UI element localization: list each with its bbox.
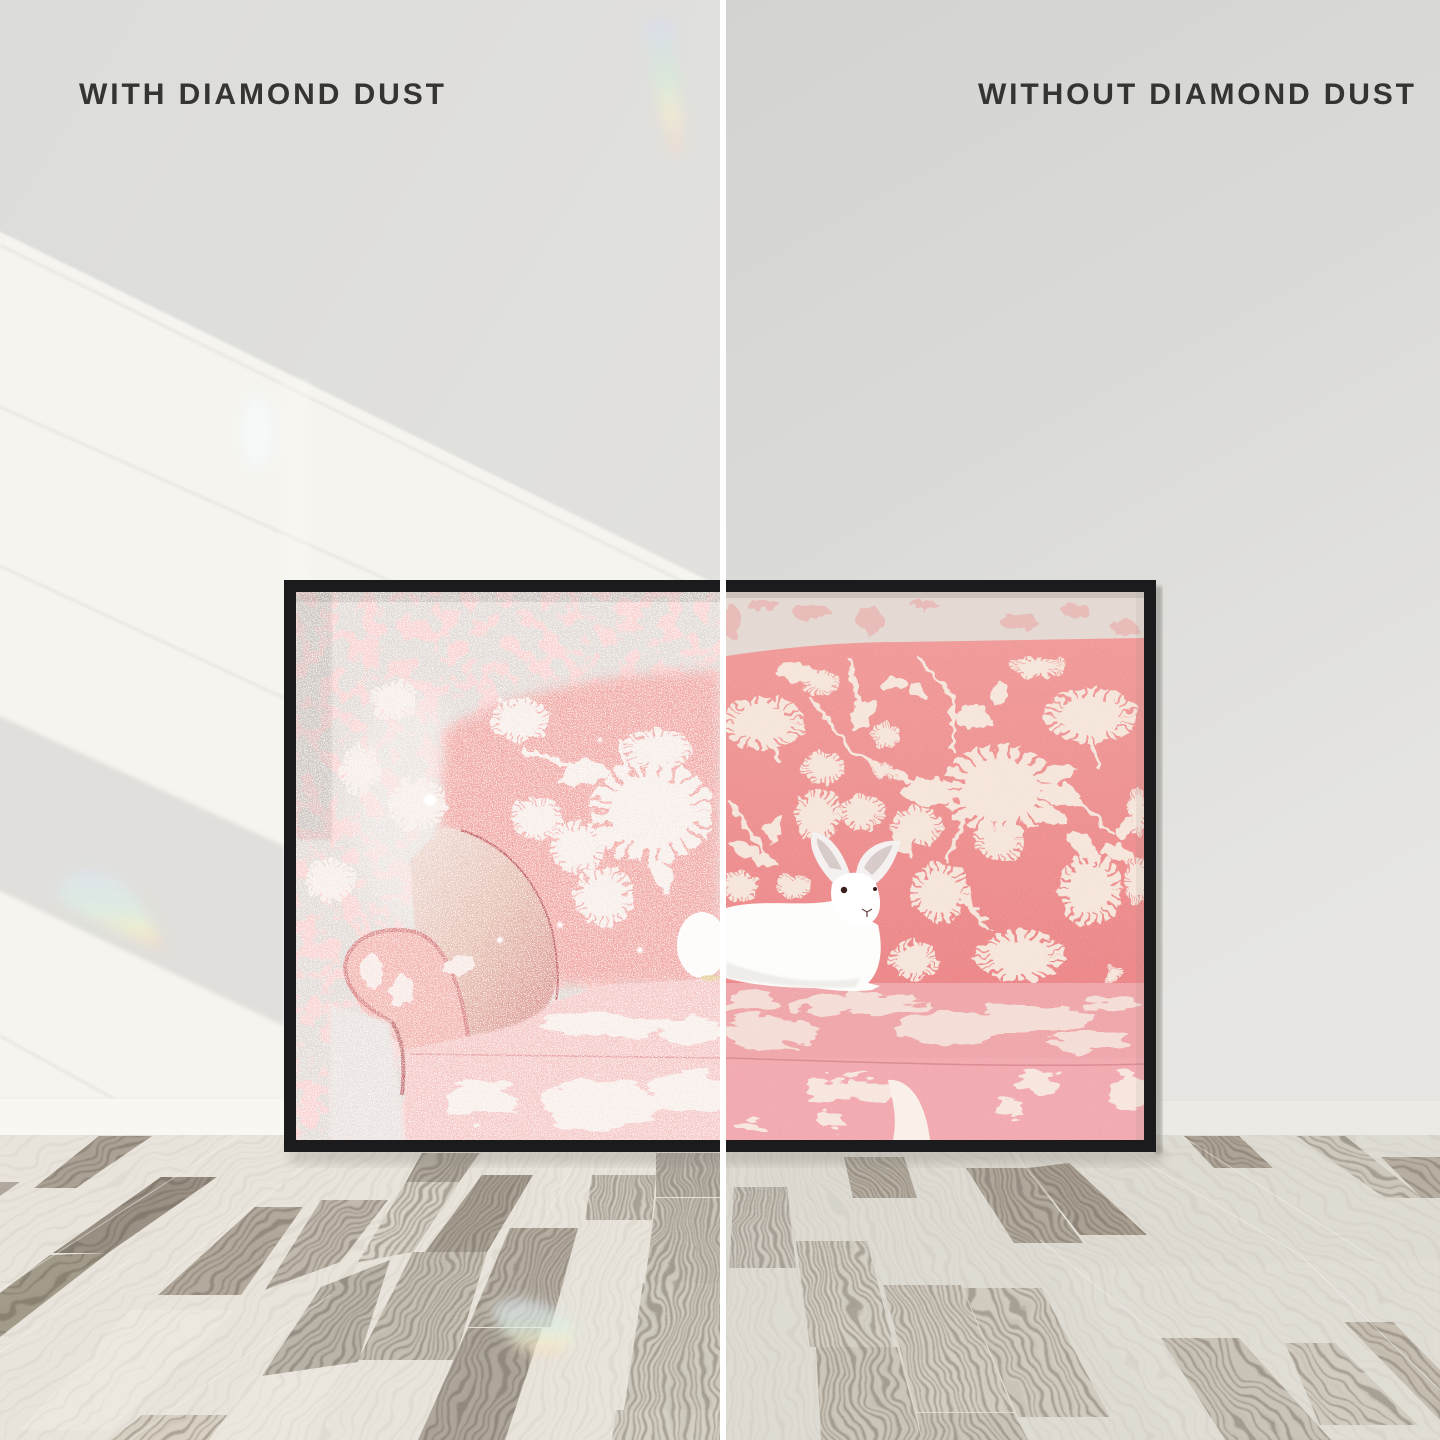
left wall (0, 232, 709, 1135)
arm front (330, 1005, 405, 1140)
white flower print (310, 684, 699, 920)
rainbow: left wall shadow (55, 869, 163, 950)
label: with diamond dust: WITH DIAMOND DUST (79, 78, 444, 111)
left floor (0, 1135, 720, 1440)
seat cushion (726, 983, 1144, 1059)
centre divider (720, 0, 726, 1440)
sofa back (726, 638, 1144, 990)
seat front (726, 1058, 1144, 1140)
right wall (726, 0, 1440, 1136)
window light beam (0, 232, 707, 1098)
diamond dust glitter (296, 592, 720, 1140)
glitter tail (677, 912, 720, 978)
large sparkles (424, 698, 643, 953)
plank seams (0, 1135, 1440, 1440)
arm bolster (410, 826, 556, 1036)
left skirting board (0, 1098, 284, 1135)
glow on left wall (241, 394, 275, 470)
white haze (354, 700, 442, 921)
right floor (726, 1135, 1440, 1440)
window reflection (296, 592, 332, 840)
right skirting board (1163, 1100, 1440, 1101)
cream drip print (888, 1080, 930, 1140)
rabbit (726, 832, 901, 991)
rainbow: top of left wall (642, 20, 686, 155)
weave texture (726, 640, 1144, 1140)
inner shadows (726, 592, 1144, 598)
rainbow: floor (490, 1298, 578, 1356)
wall behind sofa (726, 592, 1144, 656)
sofa seat (405, 978, 720, 1140)
wood grain: darker boards (0, 1136, 1440, 1440)
wood grain: all floor boards (0, 1135, 1440, 1440)
sofa back (440, 671, 720, 985)
window shadow bar (0, 698, 284, 1026)
label: without diamond dust: WITHOUT DIAMOND DUST (978, 78, 1414, 111)
arm scroll (345, 930, 470, 1050)
artwork: without diamond dust (720, 592, 1148, 1140)
artwork: with diamond dust (296, 592, 727, 1140)
cream flower print (725, 656, 1146, 984)
frame shadow (290, 1150, 1162, 1162)
picture frame (284, 580, 1156, 1152)
